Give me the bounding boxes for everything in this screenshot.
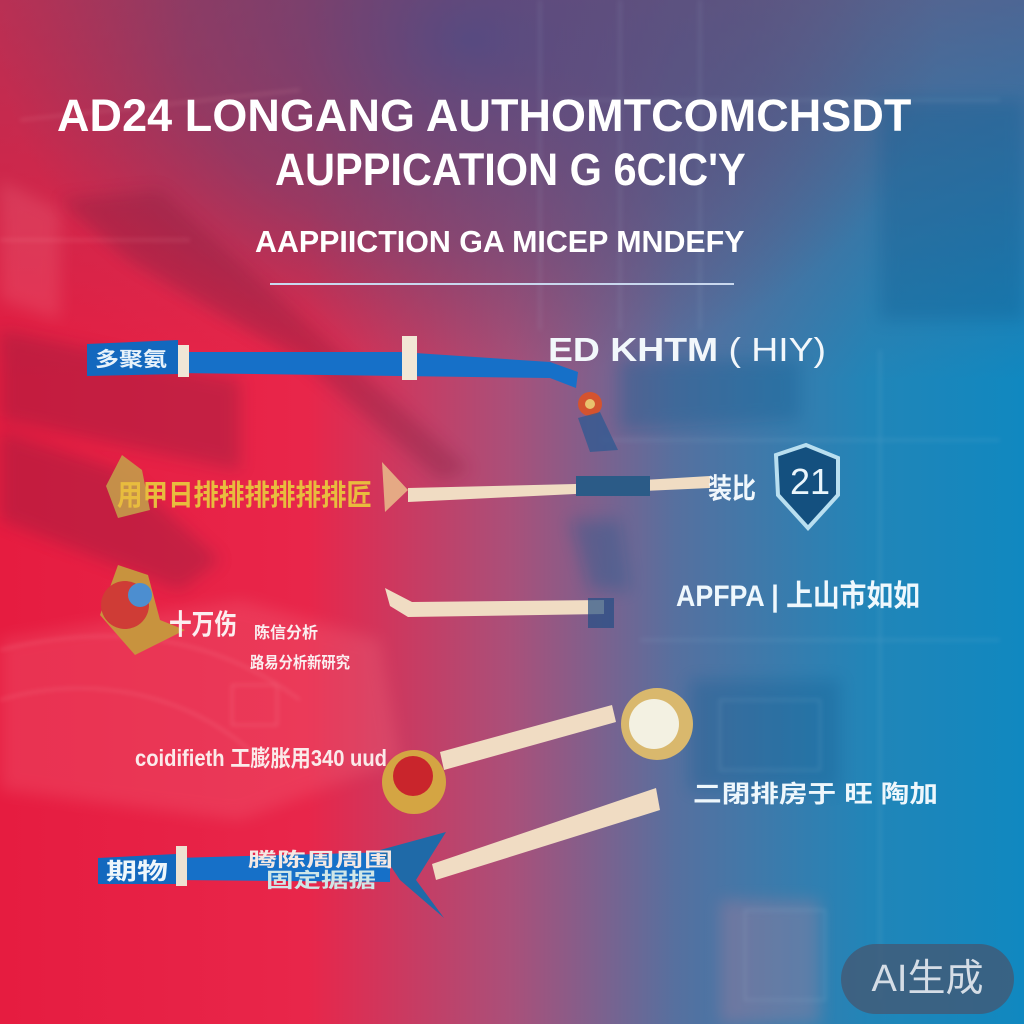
row 2: text and badge [708, 445, 838, 528]
row 2: connector [382, 462, 710, 512]
row 3: left text: 陈信分析 [254, 623, 318, 642]
divider line [270, 283, 734, 285]
row 5: blue label and banner: 期物 [106, 858, 168, 884]
row 3: left text: 路易分析新研究 [250, 653, 350, 672]
row 5: blue label and banner: 腾陈周周围 [248, 848, 393, 871]
row 1: blue label and banner [87, 336, 578, 388]
row 3: connector [385, 588, 614, 628]
row 2: text and badge: 装比 [708, 473, 756, 504]
title line 2: AUPPICATION G 6CIC'Y [275, 144, 746, 195]
row 3: right text: APFPA | 上山市如如 [676, 580, 920, 613]
row 1: blue label and banner: 多聚氨 [95, 347, 167, 371]
AI badge: AI生成 [872, 958, 983, 1000]
row 3: emblem [100, 565, 185, 655]
title line 1: AD24 LONGANG AUTHOMTCOMCHSDT [57, 90, 911, 141]
row 1: right heading: ED KHTM ( HIY) [548, 331, 826, 368]
row 4: right text: 二閉排房于 旺 陶加 [693, 781, 938, 808]
row 3: left text: 十万伤 [169, 609, 237, 640]
row 1: marker [578, 392, 618, 452]
row 5: blue label and banner [98, 832, 446, 918]
row 4: connector and gold medal [440, 688, 693, 770]
row 2: text and badge: 21 [790, 461, 830, 502]
row 3: left text [169, 609, 350, 672]
row 5: connector [432, 788, 660, 880]
row 4: left text: coidifieth 工膨胀用340 uud [135, 745, 387, 771]
row 5: blue label and banner: 固定据据 [266, 868, 376, 892]
row 2: yellow label [106, 455, 372, 518]
row 4: left red medal [382, 750, 446, 814]
AI badge [841, 944, 1014, 1014]
subtitle: AAPPIICTION GA MICEP MNDEFY [255, 224, 744, 259]
title [57, 90, 911, 195]
row 2: yellow label: 用甲日排排排排排排匠 [117, 479, 372, 512]
